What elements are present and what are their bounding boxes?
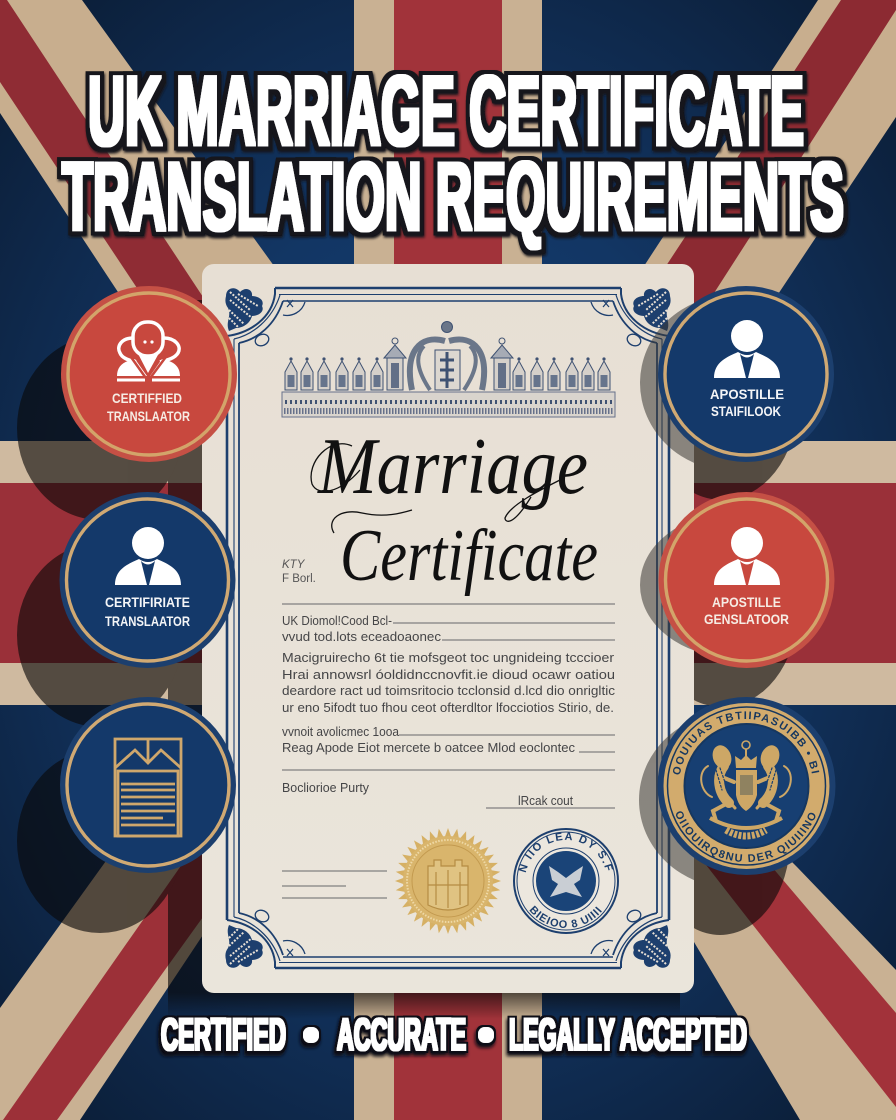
badge: certificate translator (navy): TRANSLAATOR xyxy=(105,613,190,629)
small side note: KTY xyxy=(282,559,306,571)
badge: royal coat of arms seal xyxy=(658,697,836,875)
cast shadows of certificate and badges xyxy=(17,300,797,1019)
icon: coat of arms xyxy=(701,741,791,836)
panel: marriage certificate document xyxy=(202,264,694,993)
badge: apostille (red): GENSLATOOR xyxy=(704,611,789,627)
certificate body text and form lines: UK Diomol!Cood Bcl- xyxy=(282,613,392,628)
badge: certificate translator (navy): CERTIFIRIATE xyxy=(105,594,190,610)
badge: certified translator (red): CERTIFFIED xyxy=(112,390,182,406)
certificate decorative border xyxy=(225,288,671,968)
icon: person xyxy=(115,527,181,585)
certificate body text and form lines xyxy=(282,604,616,898)
badge: apostille (red) xyxy=(658,492,834,668)
badge: apostille (navy) xyxy=(658,286,834,462)
script heading: Certificate xyxy=(340,515,598,597)
palace crown engraving xyxy=(282,322,615,417)
certificate body text and form lines: deardore ract ud toimsritocio tcclonsid d.lcd dio onrigltic xyxy=(282,683,616,698)
gold foil seal xyxy=(395,828,501,934)
blue ink stamp xyxy=(513,828,619,934)
tagline: CERTIFIED xyxy=(161,1009,286,1060)
certificate body text and form lines: ur eno 5ifodt tuo fhou ceot ofterdltor lfocciotios Stirio, de. xyxy=(282,700,614,715)
badge: royal coat of arms seal: OOUIUAS TBTIIPASUIBB • BI xyxy=(673,711,820,774)
icon: person xyxy=(714,320,780,378)
badge: apostille (red): APOSTILLE xyxy=(712,594,781,610)
title xyxy=(62,55,844,251)
icon: translator bust xyxy=(117,322,180,381)
badge: certified translator (red): TRANSLAATOR xyxy=(107,408,190,424)
small side note: F Borl. xyxy=(282,573,316,585)
script heading xyxy=(311,423,598,597)
small side note xyxy=(282,559,316,585)
icon: document xyxy=(115,739,181,836)
certificate body text and form lines: lRcak cout xyxy=(518,793,573,808)
badge: apostille (navy): APOSTILLE xyxy=(710,386,784,402)
certificate body text and form lines: vvnoit avolicmec 1ooa xyxy=(282,724,400,739)
certificate body text and form lines: Reag Apode Eiot mercete b oatcee Mlod eoclontec xyxy=(282,740,575,755)
badge: document (navy) xyxy=(60,697,236,873)
icon: person xyxy=(714,527,780,585)
badge: royal coat of arms seal: OIIOUIRQ8NU DER QIUIIINO xyxy=(676,811,816,862)
badge shadows falling on certificate xyxy=(639,303,694,880)
tagline: ACCURATE xyxy=(337,1009,466,1060)
certificate body text and form lines: vvud tod.lots eceadoaonec xyxy=(282,629,442,644)
badge: apostille (navy): STAIFILOOK xyxy=(711,403,781,419)
blue ink stamp: N IIO LEA DY S.F xyxy=(518,832,613,872)
certificate body text and form lines: Macigruirecho 6t tie mofsgeot toc ungnideing tcccioer xyxy=(282,650,615,665)
badge: certified translator (red) xyxy=(61,286,237,462)
certificate body text and form lines: Bocliorioe Purty xyxy=(282,780,369,795)
tagline xyxy=(161,1009,747,1060)
certificate body text and form lines: Hrai annowsrl óoldidnccnovfit.ie dioud ocawr oatiou xyxy=(282,667,615,682)
script heading: Marriage xyxy=(317,423,588,511)
badge: certificate translator (navy) xyxy=(60,492,236,668)
blue ink stamp: BIEIOO 8 UIIII xyxy=(529,906,602,928)
